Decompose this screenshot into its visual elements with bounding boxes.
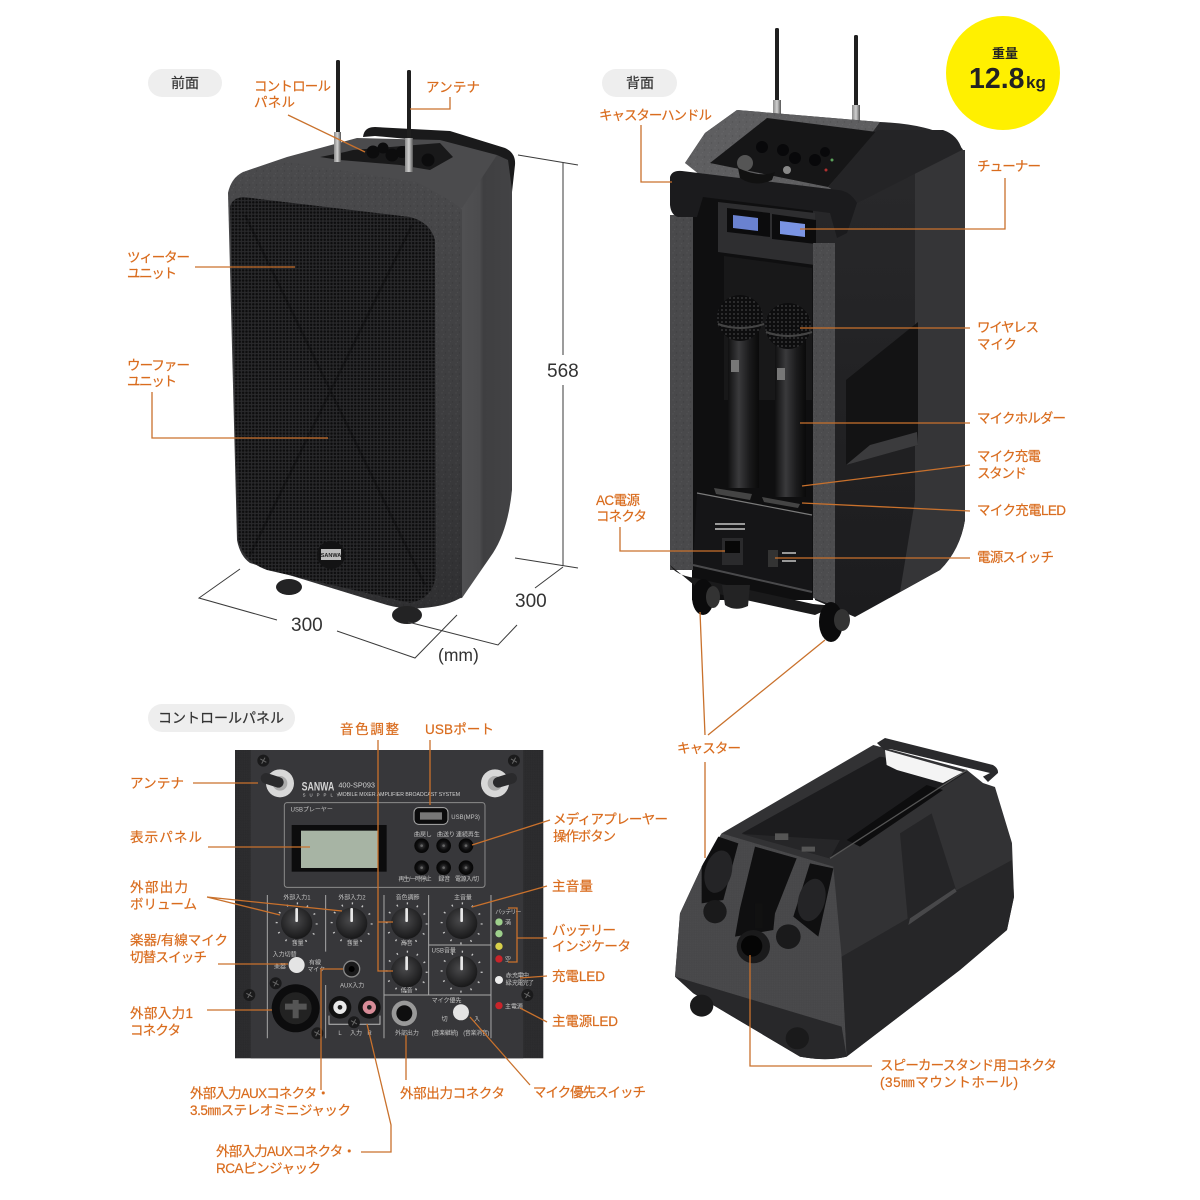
USB player box: 連続再生 [456, 831, 480, 839]
output jack: 外部出力 [395, 1029, 419, 1037]
main power led [495, 1002, 523, 1010]
back plate [724, 256, 812, 400]
dimension lines [199, 155, 578, 658]
label: stand connector: (35㎜マウントホール) [880, 1075, 1018, 1090]
label: wireless mic [977, 320, 1039, 352]
front face [675, 833, 847, 1059]
stand socket [737, 903, 770, 963]
knob labels: USB音量 [432, 946, 456, 954]
knob labels: 高音 [401, 939, 413, 947]
body [675, 745, 1014, 1059]
unit: (mm) [438, 645, 479, 665]
caster left [692, 579, 720, 615]
body [685, 110, 965, 617]
pill: front view: 前面 [171, 75, 199, 91]
mic left [717, 295, 764, 488]
bottom skirt [670, 565, 835, 615]
label: mic charging stand: マイク充電 [977, 449, 1041, 464]
label: AUX RCA jack [216, 1144, 356, 1176]
handle gap [885, 750, 963, 783]
interior [742, 757, 967, 858]
label: tweeter [127, 250, 190, 281]
label: AC connector: AC電源 [596, 493, 640, 508]
logo [317, 541, 345, 569]
USB player box: USBプレーヤー [291, 807, 333, 814]
label: woofer [127, 358, 190, 389]
battery leds: 空 [505, 956, 511, 964]
USB player box: USB(MP3) [451, 815, 480, 821]
label: USB port: USBポート [425, 722, 494, 737]
microphones [717, 295, 812, 497]
knob labels: 音色調節 [396, 894, 420, 902]
label: battery indicator [552, 923, 631, 954]
label: mic charging stand: スタンド [977, 466, 1027, 481]
pill: back view: 背面 [626, 75, 654, 91]
label: media player buttons: メディアプレーヤー [553, 811, 668, 827]
weight badge [946, 16, 1060, 130]
leader lines [152, 97, 1005, 1152]
usb port [414, 808, 448, 824]
knob labels: 主音量 [454, 894, 472, 902]
label: display panel: 表示パネル [130, 830, 202, 845]
labels: back view [596, 108, 1066, 1090]
top connector recess [738, 168, 775, 184]
label: input 1 connector [130, 1006, 193, 1038]
tuner plate [718, 202, 816, 265]
label: external output volume [130, 880, 197, 912]
label: battery indicator: バッテリー [552, 923, 616, 938]
label: external output volume: 外部出力 [130, 880, 188, 895]
pill: back view [602, 69, 677, 97]
priority switch: (音楽消音) [463, 1029, 489, 1037]
label: input switch: 切替スイッチ [130, 950, 207, 965]
face plate [251, 750, 523, 1058]
knob labels: 外部入力1 [283, 894, 311, 902]
rca jacks: 入力 [350, 1029, 362, 1037]
label: main volume: 主音量 [552, 878, 593, 894]
knob labels: 低音 [401, 986, 413, 994]
main power led: 主電源 [505, 1002, 523, 1010]
label: control panel: パネル [254, 95, 295, 110]
label: tuner: チューナー [977, 159, 1041, 174]
rca jacks: L [338, 1031, 342, 1037]
brand: SUPPLY [303, 793, 343, 798]
USB player box: 再生/一時停止 [398, 875, 432, 883]
label: AUX RCA jack: 外部入力AUXコネクタ・ [216, 1144, 356, 1159]
left pillar [670, 215, 693, 570]
label: mic holder: マイクホルダー [977, 411, 1066, 426]
priority switch: 入 [474, 1016, 480, 1023]
brand: SANWA [302, 779, 335, 793]
grille [230, 197, 436, 603]
handle [877, 738, 998, 782]
label: mic charging LED: マイク充電LED [977, 503, 1066, 518]
window recess [846, 322, 918, 465]
AC inlet [722, 538, 743, 565]
lower side band [842, 860, 1014, 1057]
knobs [277, 903, 482, 992]
antenna left [266, 769, 294, 797]
label: antenna: アンテナ [426, 80, 480, 95]
label: woofer: ウーファー [127, 358, 190, 373]
pill: front view [148, 69, 222, 97]
label: charging LED: 充電LED [552, 969, 605, 984]
USB player box: 曲戻し [414, 831, 432, 839]
input switch: マイク [307, 967, 325, 974]
input switch: 有線 [309, 958, 321, 966]
right pillar [813, 243, 835, 606]
brand: MOBILE MIXER AMPLIFIER BROADCAST SYSTEM [338, 792, 460, 798]
weight badge: 12.8 [969, 63, 1024, 95]
handle [363, 127, 515, 192]
labels: front view [127, 79, 480, 389]
label: mic priority switch: マイク優先スイッチ [533, 1085, 646, 1100]
side recess [900, 813, 957, 925]
input switch: 入力切替 [273, 950, 297, 958]
top surface [243, 138, 497, 208]
weight badge: 重量 [992, 46, 1018, 61]
knob labels [283, 894, 472, 994]
speaker: lying down view [675, 738, 1014, 1059]
brand: 400-SP093 [338, 780, 375, 789]
mic right [765, 303, 812, 497]
front frame [228, 162, 462, 609]
aux jack [340, 961, 364, 990]
label: input 1 connector: コネクタ [130, 1023, 181, 1038]
speaker: front view [228, 60, 515, 624]
wheel recess [702, 837, 833, 937]
battery leds [495, 909, 521, 964]
center foot [722, 585, 750, 609]
section dividers [267, 895, 491, 1038]
mic stand base [714, 488, 800, 508]
caster right [819, 602, 850, 642]
label: AUX mini jack: 外部入力AUXコネクタ・ [190, 1086, 330, 1101]
weight badge: kg [1026, 73, 1046, 92]
label: caster: キャスター [677, 741, 741, 756]
display [292, 825, 387, 872]
feet [690, 900, 809, 1049]
label: battery indicator: インジケータ [552, 939, 631, 954]
label: output connector: 外部出力コネクタ [400, 1086, 505, 1101]
label: tweeter: ツィーター [127, 250, 190, 265]
feet [276, 579, 422, 624]
label: control panel: コントロール [254, 79, 331, 94]
lower panel [693, 493, 812, 592]
logo: SANWA [321, 553, 341, 559]
side body [440, 155, 512, 600]
label: input switch [130, 933, 228, 965]
cavity [692, 197, 813, 600]
dimension: width: 300 [291, 615, 323, 636]
USB player box: 電源入/切 [455, 875, 479, 883]
label: wireless mic: マイク [977, 337, 1017, 352]
label: antenna: アンテナ [130, 776, 184, 791]
label: AUX RCA jack: RCAピンジャック [216, 1161, 321, 1176]
brand [302, 779, 460, 798]
buttons [414, 838, 429, 853]
priority switch: (音楽継続) [432, 1029, 458, 1037]
screws [243, 755, 533, 1039]
rca jacks [329, 996, 381, 1037]
priority switch: マイク優先 [432, 996, 461, 1004]
labels: control panel [130, 721, 668, 1176]
antenna right [405, 70, 413, 172]
priority switch: 切 [442, 1016, 448, 1023]
speaker: back view [670, 28, 965, 642]
top controls [320, 142, 453, 170]
rim [830, 770, 967, 858]
label: input switch: 楽器/有線マイク [130, 933, 228, 948]
knob labels: 音量 [347, 939, 359, 947]
control panel [235, 750, 543, 1058]
antenna left [334, 60, 341, 162]
label: power switch: 電源スイッチ [977, 550, 1054, 565]
output jack [392, 1001, 419, 1037]
knob labels: 音量 [292, 939, 304, 947]
label: media player buttons [553, 811, 668, 844]
label: AUX mini jack [190, 1086, 351, 1118]
charge led: 緑:充電完了 [506, 979, 534, 987]
dark top facet [828, 130, 962, 203]
label: woofer: ユニット [127, 374, 177, 389]
label: tweeter: ユニット [127, 266, 177, 281]
input switch: 楽器 [274, 962, 286, 970]
aux jack: AUX入力 [340, 982, 364, 990]
rca jacks: R [367, 1031, 372, 1037]
label: wireless mic: ワイヤレス [977, 320, 1039, 335]
label: mic charging stand [977, 449, 1041, 481]
label: external output volume: ボリューム [130, 897, 197, 912]
label: stand connector: スピーカースタンド用コネクタ [880, 1058, 1057, 1073]
switch [768, 550, 778, 567]
antenna right [481, 769, 512, 797]
label: control panel [254, 79, 331, 110]
label: AC connector [596, 493, 647, 524]
label: AC connector: コネクタ [596, 509, 647, 524]
label: caster handle: キャスターハンドル [599, 108, 712, 123]
label: input 1 connector: 外部入力1 [130, 1006, 193, 1021]
combo jack [272, 984, 320, 1032]
knob labels: 外部入力2 [338, 894, 366, 902]
lower band [675, 977, 847, 1059]
input switch [273, 950, 325, 974]
top panel [710, 118, 877, 187]
battery leds: バッテリー [495, 909, 521, 916]
dimension: depth: 300 [515, 591, 547, 612]
label: tone: 音色調整 [340, 721, 400, 737]
priority switch [432, 996, 489, 1037]
label: stand connector [880, 1058, 1057, 1090]
charge led: 赤:充電中 [506, 972, 529, 980]
pill: control panel: コントロールパネル [158, 710, 284, 726]
casters [700, 847, 830, 924]
pill: control panel [148, 704, 295, 732]
USB player box: 録音 [438, 875, 450, 883]
battery leds: 満 [505, 919, 511, 927]
label: media player buttons: 操作ボタン [553, 829, 616, 844]
handle [670, 171, 857, 238]
antennas [773, 28, 860, 141]
dimension: height: 568 [547, 361, 579, 382]
charge led [495, 972, 534, 987]
USB player box: 曲送り [437, 831, 455, 839]
label: main power LED: 主電源LED [552, 1014, 618, 1029]
USB player box [284, 803, 485, 887]
label: AUX mini jack: 3.5㎜ステレオミニジャック [190, 1103, 351, 1118]
